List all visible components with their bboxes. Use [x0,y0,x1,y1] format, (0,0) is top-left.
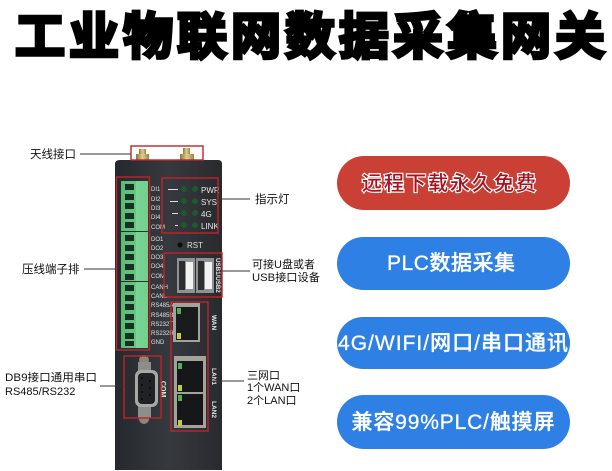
label: USB [252,257,320,284]
pill: connectivity: 4G/WIFI/网口/串口通讯 [338,332,568,355]
pill: compatibility: 兼容99%PLC/触摸屏 [352,411,554,434]
terminal labels: DI2 [151,197,161,203]
terminal labels: CANL [151,294,168,300]
terminal labels: COM [151,274,165,280]
callout lines [80,154,250,386]
reset button [178,241,203,250]
device body [115,160,222,470]
terminal labels: DO4 [151,264,164,270]
label: indicators: 指示灯 [255,192,290,206]
title: 工业物联网数据采集网关 [15,9,605,65]
terminal labels: RS485B [151,313,173,319]
pill: compatibility [337,395,570,449]
label: USB: USB接口设备 [252,270,320,284]
reset button: RST [187,241,203,250]
pill: remote download [337,156,570,210]
terminal labels: CANH [151,285,168,291]
terminal labels [151,187,174,346]
status LEDs: SYS [201,198,217,207]
USB ports: USB1/USB2 [214,258,221,293]
terminal labels: RS232R [151,331,174,337]
terminal labels: DI1 [151,187,161,193]
label: terminals: 压线端子排 [22,262,80,276]
label: USB: 可接U盘或者 [252,257,315,271]
label: DB9: DB9接口通用串口 [5,371,97,384]
terminal labels: DO3 [151,255,164,261]
status LEDs: PWR [201,186,220,195]
pill: PLC data [337,237,570,290]
WAN port: WAN [210,315,217,330]
status LEDs: 4G [201,210,212,219]
status LEDs: LINK [201,222,219,231]
COM port: COM [159,381,166,398]
LAN ports: LAN1 [210,368,217,385]
terminal labels: DO2 [151,246,164,252]
pill: connectivity [337,317,570,369]
terminal labels: DO1 [151,237,164,243]
terminal labels: COM [151,225,165,231]
terminal labels: DI3 [151,206,161,212]
label: network ports [247,370,300,407]
label: network ports: 三网口 [247,370,280,382]
label: network ports: 1个WAN口 [247,381,300,394]
label: antenna: 天线接口 [30,147,76,161]
label: DB9: RS485/RS232 [5,386,75,398]
label: DB9 [5,371,97,398]
terminal labels: DI4 [151,215,161,221]
label: network ports: 2个LAN口 [247,394,297,407]
WAN port [173,303,217,342]
terminal labels: RS485A [151,303,173,309]
status LEDs [168,186,220,231]
COM port [135,355,166,424]
pill: remote download: 远程下载永久免费 [362,172,536,195]
LAN ports: LAN2 [210,401,217,418]
LAN ports [174,356,217,428]
pill: PLC data: PLC数据采集 [387,252,515,275]
terminal blocks [121,181,148,348]
USB ports [177,258,221,293]
device [115,146,222,470]
terminal labels: GND [151,340,165,346]
red highlight boxes [116,146,222,431]
terminal labels: RS232T [151,322,173,328]
antennas [136,148,194,161]
